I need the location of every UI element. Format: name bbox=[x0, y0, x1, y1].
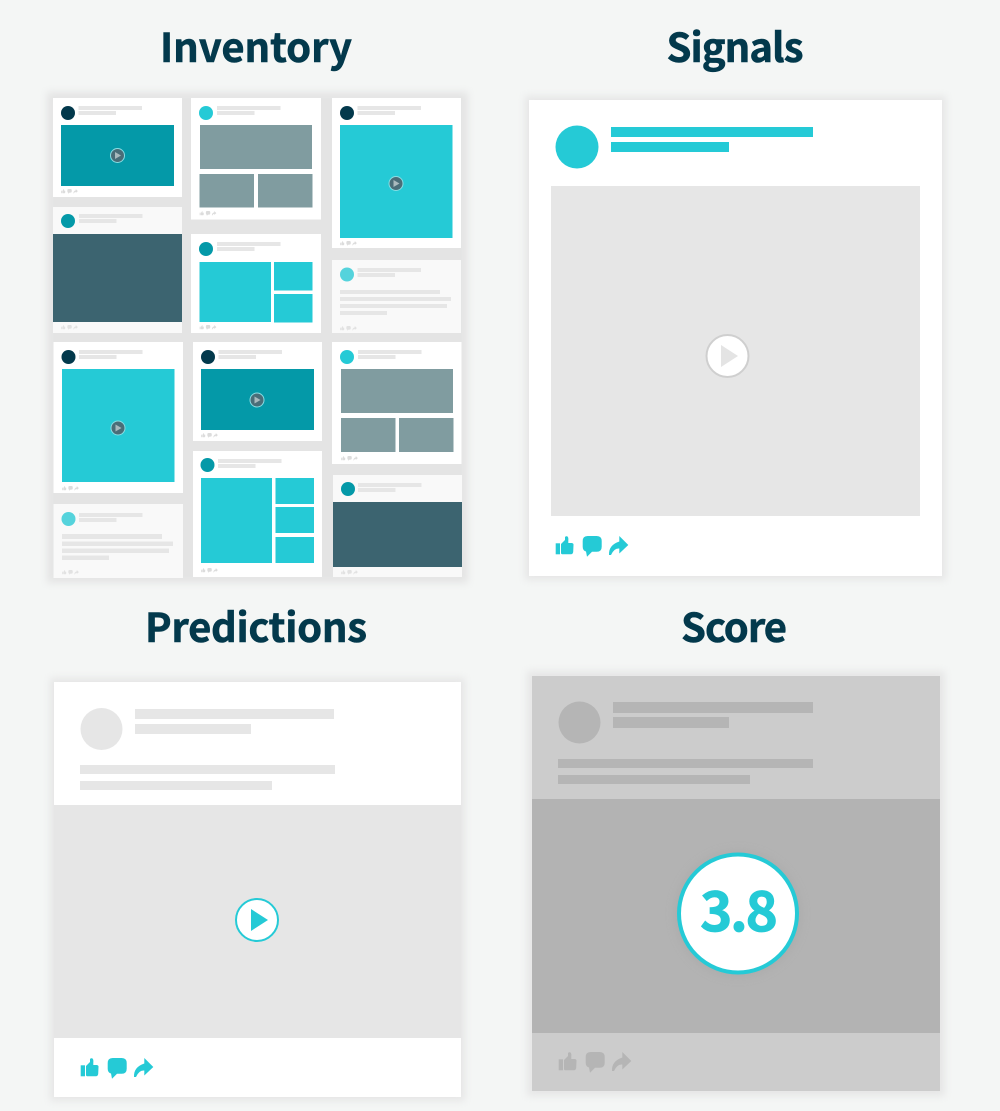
inventory card: square video, row three bbox=[54, 342, 183, 493]
panel: signals post bbox=[525, 96, 946, 580]
inventory card: collage, cyan bbox=[191, 234, 321, 333]
avatar bbox=[556, 126, 598, 168]
inventory card: image, slate, row four bbox=[333, 475, 462, 577]
inventory card: text post bbox=[332, 260, 461, 333]
icons: like, comment, share bbox=[559, 1052, 631, 1073]
title: Inventory: Inventory bbox=[160, 16, 352, 74]
panel: score post bbox=[527, 671, 945, 1096]
title: Predictions: Predictions bbox=[145, 596, 367, 654]
inventory card: video, dark teal bbox=[53, 98, 182, 197]
inventory card: video, dark teal, row three bbox=[193, 342, 322, 441]
caption lines bbox=[80, 765, 335, 790]
icons: like, comment, share bbox=[556, 536, 628, 557]
inventory card: gallery, row three bbox=[332, 342, 462, 464]
icon: play button bbox=[236, 899, 278, 941]
panel: inventory grid bbox=[47, 92, 468, 583]
headline bars bbox=[613, 702, 813, 728]
inventory card: square video, cyan bbox=[332, 98, 461, 248]
inventory card: collage, row four bbox=[193, 451, 322, 577]
video placeholder bbox=[54, 805, 461, 1038]
title: Score: Score bbox=[681, 596, 787, 654]
video placeholder bbox=[551, 186, 920, 516]
inventory card: text post, row four bbox=[54, 504, 183, 578]
icons: like, comment, share bbox=[81, 1058, 153, 1079]
inventory card: image, slate bbox=[53, 207, 182, 333]
icon: play button bbox=[706, 335, 748, 377]
avatar bbox=[80, 708, 122, 750]
avatar bbox=[558, 702, 600, 744]
score badge: 3.8 bbox=[700, 867, 778, 947]
headline bars bbox=[611, 127, 813, 152]
headline bars bbox=[135, 709, 334, 734]
video placeholder bbox=[532, 799, 940, 1033]
caption lines bbox=[558, 759, 813, 784]
inventory card: gallery, grey bbox=[191, 98, 321, 220]
score badge bbox=[674, 850, 802, 978]
panel: predictions post bbox=[50, 678, 465, 1101]
title: Signals: Signals bbox=[666, 16, 804, 74]
